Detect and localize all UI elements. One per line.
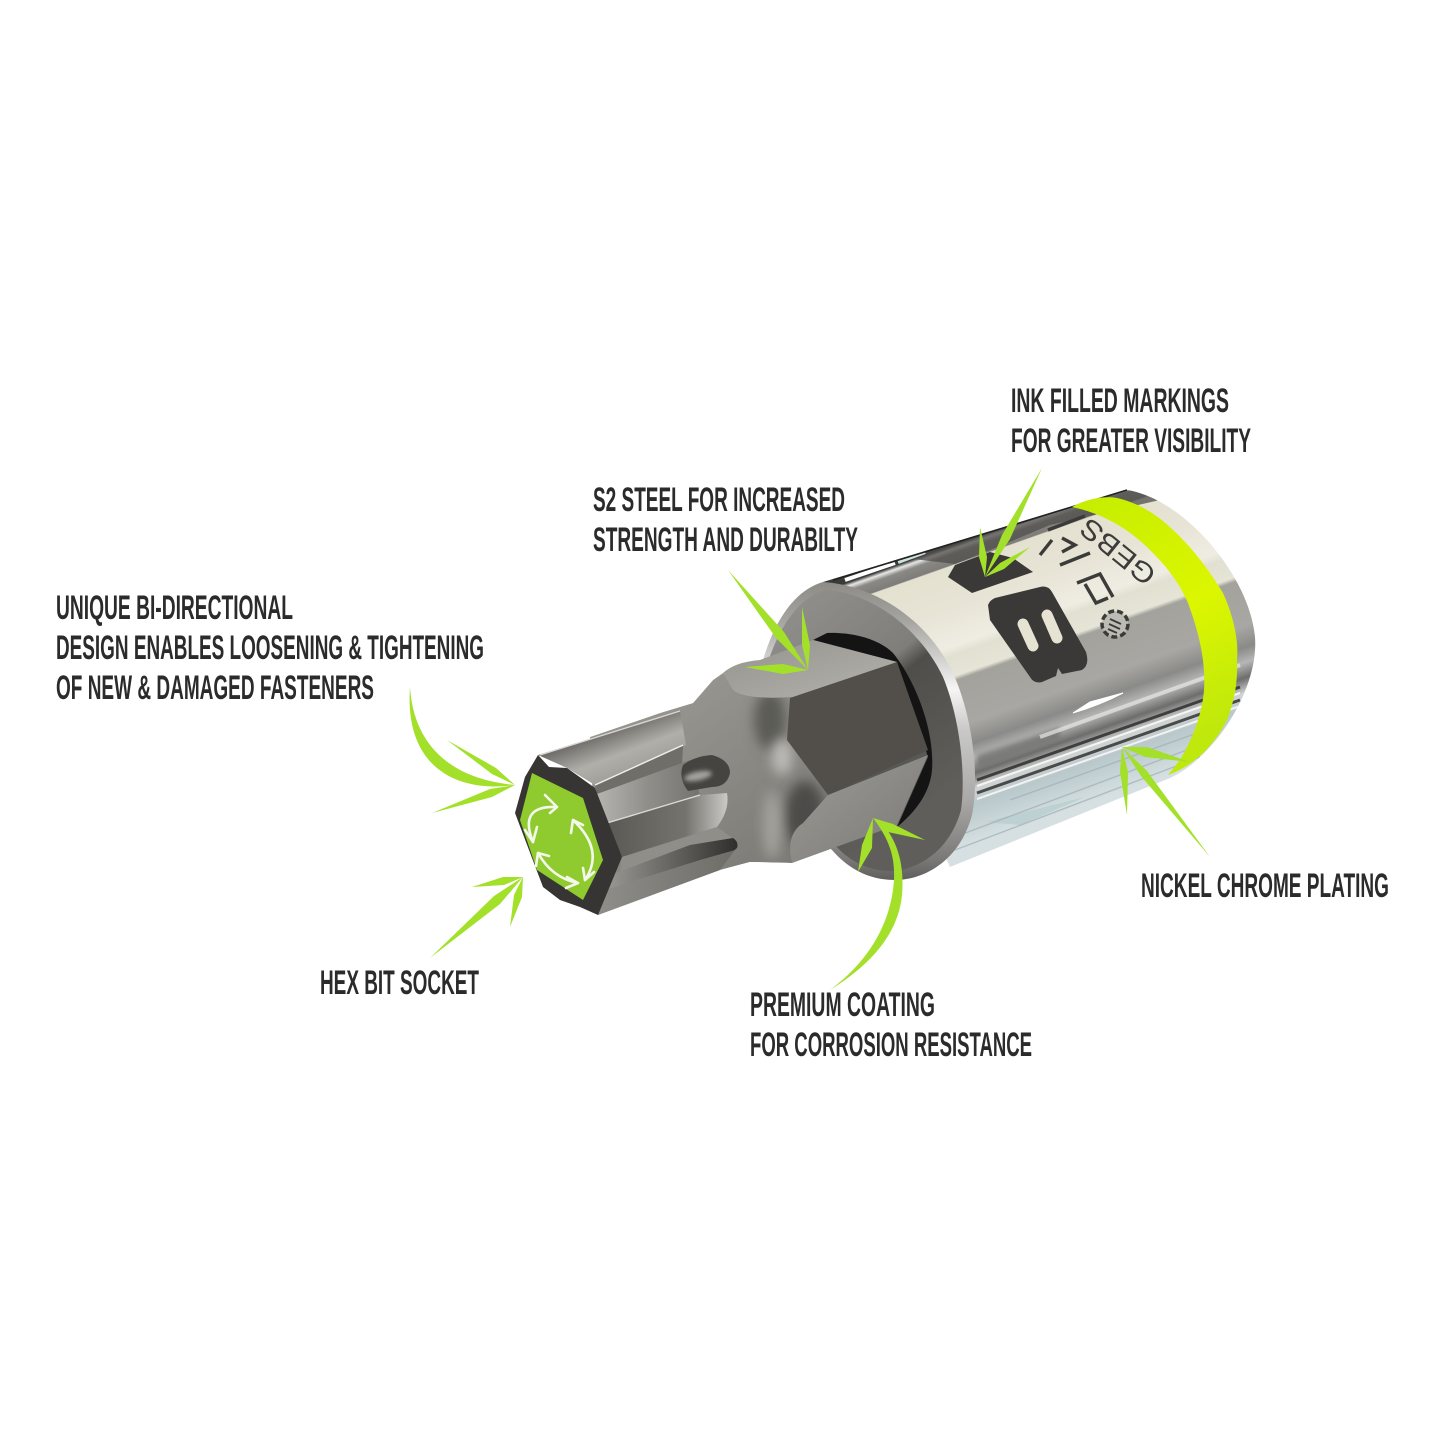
hex shank <box>723 640 928 863</box>
torx lower lobe <box>598 827 738 915</box>
neon yellow band <box>1072 497 1237 775</box>
label: ink filled markings: INK FILLED MARKINGS <box>1011 382 1229 420</box>
label: bi-directional design: OF NEW & DAMAGED FASTENERS <box>56 669 374 707</box>
ink filled marking: size number 8 <box>988 587 1087 682</box>
arrow: ink filled markings <box>979 468 1042 577</box>
label: ink filled markings <box>1011 382 1251 460</box>
arrow: premium coating <box>830 818 925 990</box>
engraved gear logo <box>1102 611 1128 637</box>
green hexagon end face <box>520 773 603 900</box>
socket front flange <box>763 582 975 880</box>
label: premium coating: PREMIUM COATING <box>750 986 935 1024</box>
torx middle flute <box>607 793 728 857</box>
engraved brand text: GEBS <box>1074 512 1162 591</box>
torx dark knob <box>681 755 730 791</box>
engraved markings <box>1040 516 1113 603</box>
arrow: S2 steel <box>728 570 810 674</box>
label: premium coating: FOR CORROSION RESISTANCE <box>750 1026 1032 1064</box>
label: ink filled markings: FOR GREATER VISIBILITY <box>1011 422 1251 460</box>
label: S2 steel <box>593 481 858 559</box>
torx channel <box>597 760 700 823</box>
white rotation arrows <box>525 795 594 888</box>
torx end rim <box>515 755 622 915</box>
label: S2 steel: STRENGTH AND DURABILTY <box>593 521 858 559</box>
torx upper lobe <box>538 711 686 785</box>
arrow: hex bit socket <box>430 877 523 958</box>
label: hex bit socket: HEX BIT SOCKET <box>320 964 479 1002</box>
arrow: nickel chrome plating <box>1120 747 1210 857</box>
label: bi-directional design: UNIQUE BI-DIRECTIONAL <box>56 589 293 627</box>
ink filled marking: dark block <box>948 552 1033 593</box>
bit neck <box>590 673 828 915</box>
product illustration: hex bit socket <box>515 490 1255 915</box>
torx valley <box>595 746 683 794</box>
label: premium coating <box>750 986 1032 1064</box>
socket body: chrome cylinder <box>823 490 1255 867</box>
label: bi-directional design <box>56 589 484 707</box>
label: S2 steel: S2 STEEL FOR INCREASED <box>593 481 845 519</box>
arrow: bi-directional design <box>410 687 515 813</box>
torx bit tip <box>515 711 738 915</box>
label: bi-directional design: DESIGN ENABLES LOOSENING & TIGHTENING <box>56 629 484 667</box>
